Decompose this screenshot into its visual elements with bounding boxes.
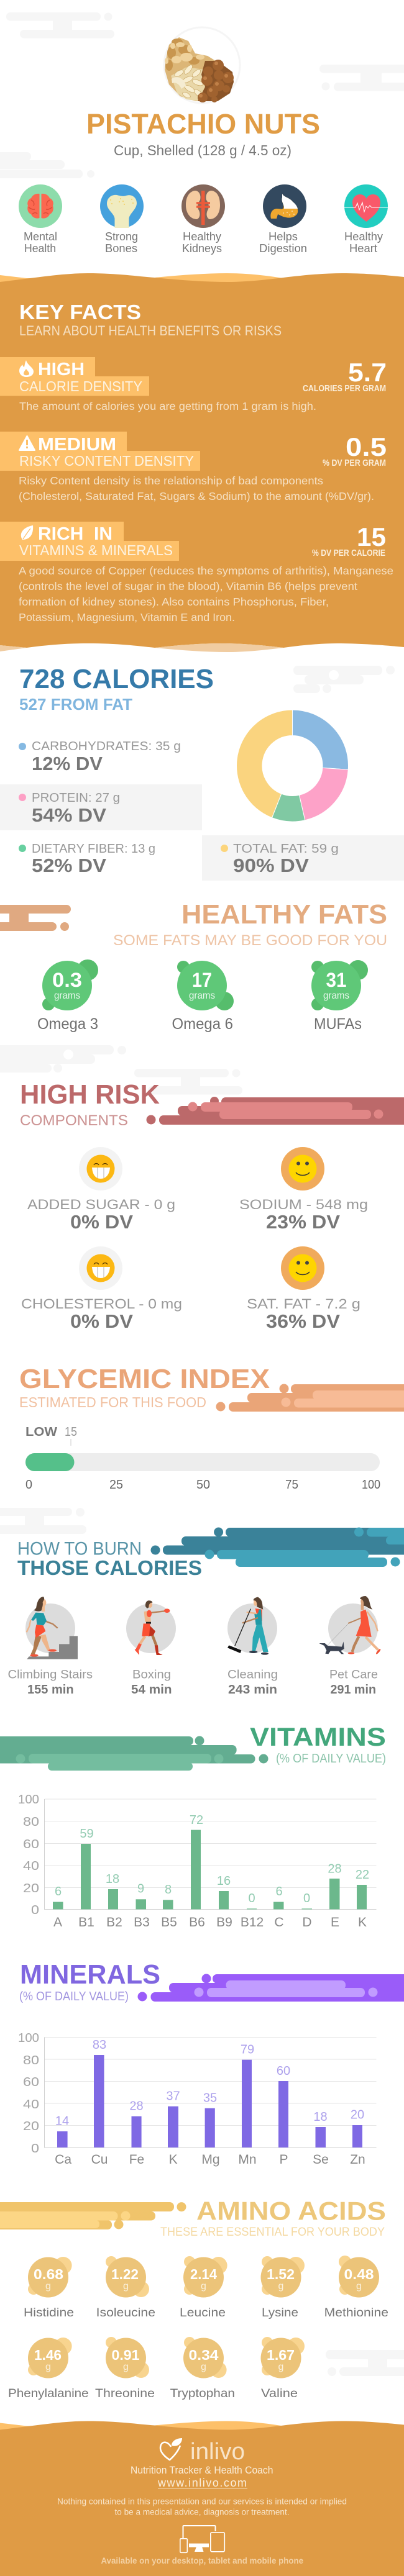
macro: total fat: 90% DV (233, 855, 309, 876)
activity: climbing stairs (7, 1597, 93, 1697)
amino: tryptophan: g (201, 2362, 206, 2372)
bar chart: vitamins: D (302, 1915, 312, 1930)
icon: warning triangle (19, 436, 35, 450)
gauge scale (25, 1478, 380, 1492)
subheading: ESTIMATED FOR THIS FOOD (19, 1394, 206, 1410)
heading: HIGH RISK (20, 1080, 160, 1110)
heading: HEALTHY FATS (181, 900, 387, 930)
activity: boxing (126, 1600, 176, 1697)
amino: tryptophan: Tryptophan (170, 2387, 235, 2400)
amino: phenylalanine: Phenylalanine (8, 2387, 89, 2400)
amino: valine: g (278, 2362, 283, 2372)
availability note: Available on your desktop, tablet and mobile phone (101, 2556, 303, 2565)
label: ADDED SUGAR - 0 g (27, 1197, 175, 1212)
activity name: Boxing (132, 1668, 171, 1682)
tagline: Nutrition Tracker & Health Coach (131, 2464, 273, 2476)
icon: woman with broom (227, 1597, 277, 1655)
panel: amino acids (0, 2196, 388, 2400)
panel: vitamins (0, 1722, 386, 1930)
amino: threonine: Threonine (95, 2387, 155, 2400)
label: Helps (269, 230, 298, 243)
panel: glycemic index (19, 1364, 404, 1492)
activity name: Cleaning (227, 1668, 278, 1682)
bar chart: minerals: K (169, 2152, 178, 2167)
activity name: Climbing Stairs (7, 1668, 93, 1682)
bar chart: vitamins: 9 (137, 1882, 144, 1895)
metric name: VITAMINS & MINERALS (19, 542, 173, 558)
amino: leucine (180, 2256, 227, 2320)
metric name: CALORIE DENSITY (19, 378, 142, 394)
heading: VITAMINS (250, 1722, 386, 1751)
bar chart: minerals: 100 (18, 2031, 39, 2045)
unit: % DV PER CALORIE (312, 548, 385, 558)
bar chart: vitamins: B5 (161, 1915, 177, 1930)
amino: lysine: 1.52 (267, 2266, 295, 2282)
logo: inlivo (160, 2438, 245, 2465)
bar chart: minerals: 83 (93, 2038, 106, 2052)
amino: tryptophan (170, 2337, 235, 2400)
bar chart: vitamins: 28 (328, 1862, 342, 1875)
gauge scale: 0 (25, 1478, 32, 1492)
panel: calories (0, 664, 404, 881)
item: saturated fat (247, 1246, 360, 1332)
banner graphic (138, 1974, 404, 2002)
label: Healthy (183, 230, 221, 243)
bar chart: vitamins: B1 (78, 1915, 94, 1930)
bar chart: vitamins: 22 (356, 1868, 369, 1882)
stat: omega 3 (37, 959, 98, 1033)
value: 5.7 (348, 358, 387, 387)
bar chart: minerals: 40 (23, 2098, 39, 2111)
gauge bar (25, 1439, 380, 1471)
icon: boxer (126, 1600, 176, 1655)
label (105, 230, 138, 255)
bar chart: vitamins: 0 (303, 1892, 310, 1905)
label: Mental (24, 230, 57, 243)
icon: flame (19, 360, 34, 377)
heading: KEY FACTS (19, 301, 141, 324)
stat: mufas: 31 (326, 969, 347, 991)
rating label: LOW (25, 1425, 57, 1439)
description: (controls the level of sugar in the blood), Vitamin B6 (helps prevent (19, 580, 357, 592)
bar chart: minerals: 28 (129, 2100, 144, 2113)
heading: AMINO ACIDS (196, 2196, 386, 2226)
label: Strong (105, 230, 138, 243)
bar chart: vitamins: C (274, 1915, 284, 1930)
amino: methionine (324, 2256, 388, 2320)
macro: dietary fiber: 52% DV (32, 855, 106, 876)
label: SODIUM - 548 mg (239, 1197, 368, 1212)
bar chart: minerals: Mg (201, 2152, 220, 2167)
amino: leucine: g (201, 2281, 206, 2292)
icon: leaf (21, 525, 33, 540)
panel: how to burn calories (7, 1528, 404, 1697)
icon: grinning face (79, 1246, 122, 1290)
title: PISTACHIO NUTS (86, 108, 320, 140)
bar chart: minerals: P (279, 2152, 288, 2167)
bar chart: vitamins: 0 (31, 1903, 39, 1917)
icon: desktop, tablet and phone (180, 2526, 224, 2552)
subheading: THESE ARE ESSENTIAL FOR YOUR BODY (160, 2225, 385, 2239)
bar chart: minerals: Fe (129, 2152, 144, 2167)
stat: omega 3: grams (54, 991, 80, 1001)
bar chart: vitamins: 20 (23, 1882, 39, 1895)
macro: protein: 54% DV (32, 804, 106, 826)
bar chart: vitamins: 60 (23, 1838, 39, 1851)
heading line 1: HOW TO BURN (17, 1539, 142, 1559)
disclaimer (57, 2497, 347, 2516)
icon: bone (100, 184, 144, 228)
amino: methionine: 0.48 (344, 2266, 374, 2282)
amino: leucine: 2.14 (190, 2266, 217, 2282)
rating: HIGH (38, 360, 85, 379)
bar chart: vitamins: A (53, 1915, 62, 1930)
macro: total fat: TOTAL FAT: 59 g (233, 842, 339, 856)
bar chart: minerals: Se (313, 2152, 329, 2167)
macro: dietary fiber: DIETARY FIBER: 13 g (32, 842, 155, 856)
banner graphic (0, 2202, 186, 2229)
bar chart: vitamins: 59 (80, 1827, 94, 1841)
bar chart: vitamins: B9 (216, 1915, 232, 1930)
stat: mufas (311, 960, 368, 1033)
duration: 155 min (27, 1683, 74, 1697)
panel: minerals (18, 1960, 404, 2167)
label: Healthy (344, 230, 383, 243)
amino: valine: Valine (261, 2387, 298, 2400)
bar chart: minerals: 14 (55, 2115, 69, 2128)
disclaimer: Nothing contained in this presentation and our services is intended or implied (57, 2497, 347, 2506)
bar chart: minerals: 18 (313, 2110, 328, 2124)
heading line 2: THOSE CALORIES (17, 1556, 202, 1579)
bar chart: vitamins: K (358, 1915, 367, 1930)
icon: smiling face (281, 1246, 324, 1290)
description (19, 474, 374, 502)
amino: valine: 1.67 (267, 2347, 295, 2363)
stat: mufas: MUFAs (314, 1015, 362, 1033)
macro: dietary fiber (19, 842, 155, 876)
label (344, 230, 383, 255)
bar chart: vitamins: B6 (189, 1915, 205, 1930)
amino: phenylalanine: g (45, 2362, 51, 2372)
bar chart: vitamins: 18 (106, 1872, 119, 1886)
banner graphic (216, 1384, 404, 1412)
label (182, 230, 222, 255)
bar chart: vitamins: 6 (275, 1885, 283, 1898)
banner graphic (0, 905, 71, 931)
amino: leucine: Leucine (180, 2306, 226, 2320)
subheading: SOME FATS MAY BE GOOD FOR YOU (113, 932, 387, 949)
glycemic value: 15 (65, 1425, 77, 1439)
fact: high calorie density (0, 357, 387, 412)
bar chart: minerals: 35 (203, 2091, 217, 2105)
gauge scale: 100 (362, 1478, 380, 1492)
amino: lysine (261, 2256, 305, 2320)
amino: isoleucine (96, 2256, 155, 2320)
description (19, 565, 393, 624)
website link: www.inlivo.com (157, 2477, 247, 2489)
amino: histidine: Histidine (24, 2306, 74, 2320)
stat: omega 6: Omega 6 (172, 1015, 233, 1033)
panel: healthy fats (0, 900, 387, 1033)
subheading: 527 FROM FAT (19, 695, 132, 714)
label: Bones (105, 242, 137, 255)
subheading: (% OF DAILY VALUE) (276, 1752, 386, 1766)
amino: threonine (95, 2337, 155, 2400)
description: (Cholesterol, Saturated Fat, Sugars & Sodium) to the amount (%DV/gr). (19, 490, 374, 502)
heading: MINERALS (20, 1960, 160, 1990)
macro: carbohydrates: 12% DV (32, 753, 103, 774)
description: A good source of Copper (reduces the symptoms of arthritis), Manganese (19, 565, 393, 577)
amino: histidine: g (45, 2281, 51, 2292)
macro: protein (0, 784, 202, 830)
amino: lysine: Lysine (262, 2306, 298, 2320)
item: added sugar (27, 1147, 175, 1233)
stat: omega 6 (172, 961, 234, 1033)
banner graphic (150, 1528, 404, 1567)
label: Health (24, 242, 56, 255)
label: Kidneys (182, 242, 222, 255)
stat: omega 6: 17 (192, 969, 212, 991)
description: The amount of calories you are getting from 1 gram is high. (19, 400, 316, 412)
bar chart: minerals: 20 (23, 2120, 39, 2133)
bar chart: vitamins: 100 (18, 1793, 39, 1807)
label: SAT. FAT - 7.2 g (247, 1296, 360, 1312)
panel: key facts (0, 273, 404, 652)
item: cholesterol (21, 1246, 182, 1332)
icon: stomach (263, 184, 306, 228)
value: 36% DV (266, 1310, 340, 1332)
amino: tryptophan: 0.34 (189, 2347, 219, 2363)
benefit: healthy kidneys (181, 184, 225, 255)
gauge scale: 50 (196, 1478, 210, 1492)
heading: 728 CALORIES (19, 664, 214, 694)
bar chart: minerals: 60 (277, 2064, 290, 2078)
metric name: RISKY CONTENT DENSITY (19, 453, 194, 469)
stat: omega 3: 0.3 (52, 969, 82, 991)
heading: GLYCEMIC INDEX (19, 1364, 270, 1394)
bar chart: minerals: Zn (350, 2152, 365, 2167)
subheading: LEARN ABOUT HEALTH BENEFITS OR RISKS (19, 323, 282, 338)
bar chart: vitamins: 72 (190, 1813, 203, 1827)
icon: woman climbing stairs (25, 1597, 78, 1659)
label: CHOLESTEROL - 0 mg (21, 1296, 182, 1312)
benefit: healthy heart (344, 184, 388, 255)
icon: brain (19, 184, 62, 228)
logo: inlivo: inlivo (190, 2439, 245, 2465)
macro: protein: PROTEIN: 27 g (32, 791, 120, 805)
bar chart: minerals: 37 (166, 2090, 180, 2103)
bar chart: minerals: 20 (351, 2108, 364, 2122)
activity: pet care (319, 1596, 381, 1697)
value: 23% DV (266, 1211, 340, 1233)
icon: kidneys (181, 184, 225, 228)
bar chart: vitamins: B2 (106, 1915, 122, 1930)
bar chart: vitamins: 6 (55, 1885, 62, 1898)
activity name: Pet Care (329, 1668, 378, 1682)
amino: isoleucine: Isoleucine (96, 2306, 155, 2320)
description: Risky Content density is the relationship of bad components (19, 474, 323, 487)
bar chart: vitamins: B3 (134, 1915, 150, 1930)
benefit: mental health (19, 184, 62, 255)
bar chart: minerals: 0 (31, 2142, 39, 2156)
amino: methionine: Methionine (324, 2306, 388, 2320)
bar chart: vitamins: 80 (23, 1815, 39, 1829)
duration: 54 min (131, 1683, 172, 1697)
label: Heart (349, 242, 377, 255)
icon: grinning face (79, 1147, 122, 1190)
panel: high risk components (20, 1080, 404, 1332)
activity: cleaning (227, 1597, 278, 1697)
bar chart: vitamins: B12 (241, 1915, 264, 1930)
amino: phenylalanine: 1.46 (34, 2347, 62, 2363)
amino: histidine: 0.68 (34, 2266, 63, 2282)
macro: carbohydrates: CARBOHYDRATES: 35 g (32, 740, 181, 753)
bar chart: vitamins: 0 (248, 1892, 255, 1905)
bar chart: vitamins: E (331, 1915, 339, 1930)
bar chart: minerals: 60 (23, 2075, 39, 2089)
icon: smiling face (281, 1147, 324, 1190)
bar chart: minerals: 80 (23, 2054, 39, 2067)
gauge scale: 75 (285, 1478, 298, 1492)
donut chart (236, 710, 348, 822)
bar chart: vitamins: 8 (165, 1883, 172, 1897)
subheading: (% OF DAILY VALUE) (19, 1990, 129, 2003)
icon: woman walking dog (319, 1596, 381, 1654)
amino: isoleucine: 1.22 (111, 2266, 139, 2282)
stat: omega 3: Omega 3 (37, 1015, 98, 1033)
amino: lysine: g (278, 2281, 283, 2292)
footer (0, 2421, 404, 2576)
stat: omega 6: grams (189, 991, 215, 1001)
value: 15 (357, 522, 386, 551)
unit: CALORIES PER GRAM (303, 384, 386, 394)
macro: total fat (202, 835, 404, 881)
amino: isoleucine: g (123, 2281, 129, 2292)
rating: MEDIUM (38, 435, 116, 455)
fact: rich in vitamins and minerals (0, 522, 393, 624)
value: 0% DV (70, 1211, 133, 1233)
amino: histidine (24, 2257, 74, 2320)
bar chart: minerals: Mn (238, 2152, 257, 2167)
macro: carbohydrates (19, 740, 181, 774)
banner graphic (147, 1097, 404, 1125)
amino: threonine: 0.91 (112, 2347, 140, 2363)
disclaimer: to be a medical advice, diagnosis or treatment. (114, 2506, 290, 2516)
benefit: helps digestion (259, 184, 307, 255)
description: formation of kidney stones). Also contains Phosphorus, Fiber, (19, 596, 329, 608)
stat: mufas: grams (323, 991, 349, 1001)
rating: RICH IN (38, 524, 112, 544)
benefit: strong bones (100, 184, 144, 255)
icon: heart (344, 184, 388, 228)
food image: mixed nuts in circle (164, 27, 240, 103)
amino: methionine: g (356, 2281, 362, 2292)
amino: valine (261, 2337, 305, 2400)
subheading: COMPONENTS (20, 1112, 128, 1129)
bar chart: minerals: 79 (241, 2043, 254, 2057)
label (259, 230, 307, 255)
bar chart: vitamins: 40 (23, 1859, 39, 1873)
amino: threonine: g (123, 2362, 129, 2372)
banner graphic (0, 1736, 269, 1771)
bar chart: vitamins (18, 1793, 377, 1930)
duration: 291 min (331, 1683, 376, 1697)
value: 0.5 (346, 432, 387, 461)
description: Potassium, Magnesium, Vitamin E and Iron. (19, 611, 235, 624)
fact: medium risky content density (0, 432, 387, 502)
bar chart: minerals (18, 2031, 377, 2167)
duration: 243 min (228, 1683, 277, 1697)
amino: phenylalanine (8, 2338, 89, 2400)
item: sodium (239, 1147, 368, 1233)
gauge scale: 25 (109, 1478, 123, 1492)
serving size subtitle: Cup, Shelled (128 g / 4.5 oz) (114, 142, 292, 158)
label: Digestion (259, 242, 307, 255)
bar chart: minerals: Ca (55, 2152, 71, 2167)
value: 0% DV (70, 1310, 133, 1332)
bar chart: minerals: Cu (91, 2152, 108, 2167)
bar chart: vitamins: 16 (217, 1874, 231, 1888)
unit: % DV PER GRAM (323, 458, 386, 468)
label (24, 230, 57, 255)
